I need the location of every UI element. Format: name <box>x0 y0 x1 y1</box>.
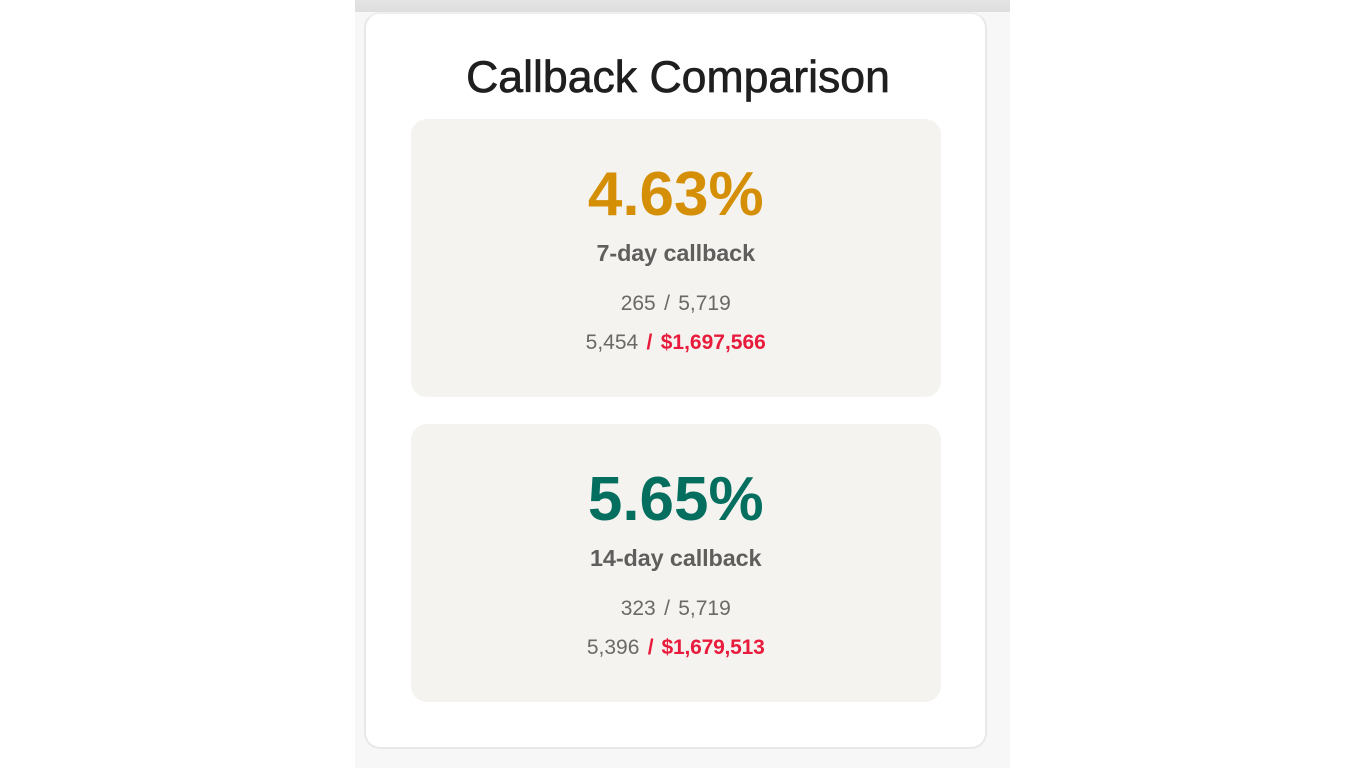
top bar <box>355 0 1010 12</box>
label: 14-day callback: 14-day callback <box>590 545 761 571</box>
counts and cost: 5,396 / $1,679,513: 5,396 / $1,679,513 <box>587 636 765 659</box>
card container <box>364 12 987 749</box>
label: 7-day callback: 7-day callback <box>596 240 755 266</box>
stat: 4.63%: 4.63% <box>588 160 764 229</box>
panel: 7-day callback <box>411 119 940 397</box>
panel: 14-day callback <box>411 424 940 702</box>
stat: 5.65%: 5.65% <box>588 465 764 534</box>
counts: 323 / 5,719: 323 / 5,719 <box>621 597 731 620</box>
counts: 265 / 5,719: 265 / 5,719 <box>621 292 731 315</box>
page column background <box>355 0 1010 768</box>
title: Callback Comparison <box>466 53 890 102</box>
counts and cost: 5,454 / $1,697,566: 5,454 / $1,697,566 <box>586 331 766 354</box>
